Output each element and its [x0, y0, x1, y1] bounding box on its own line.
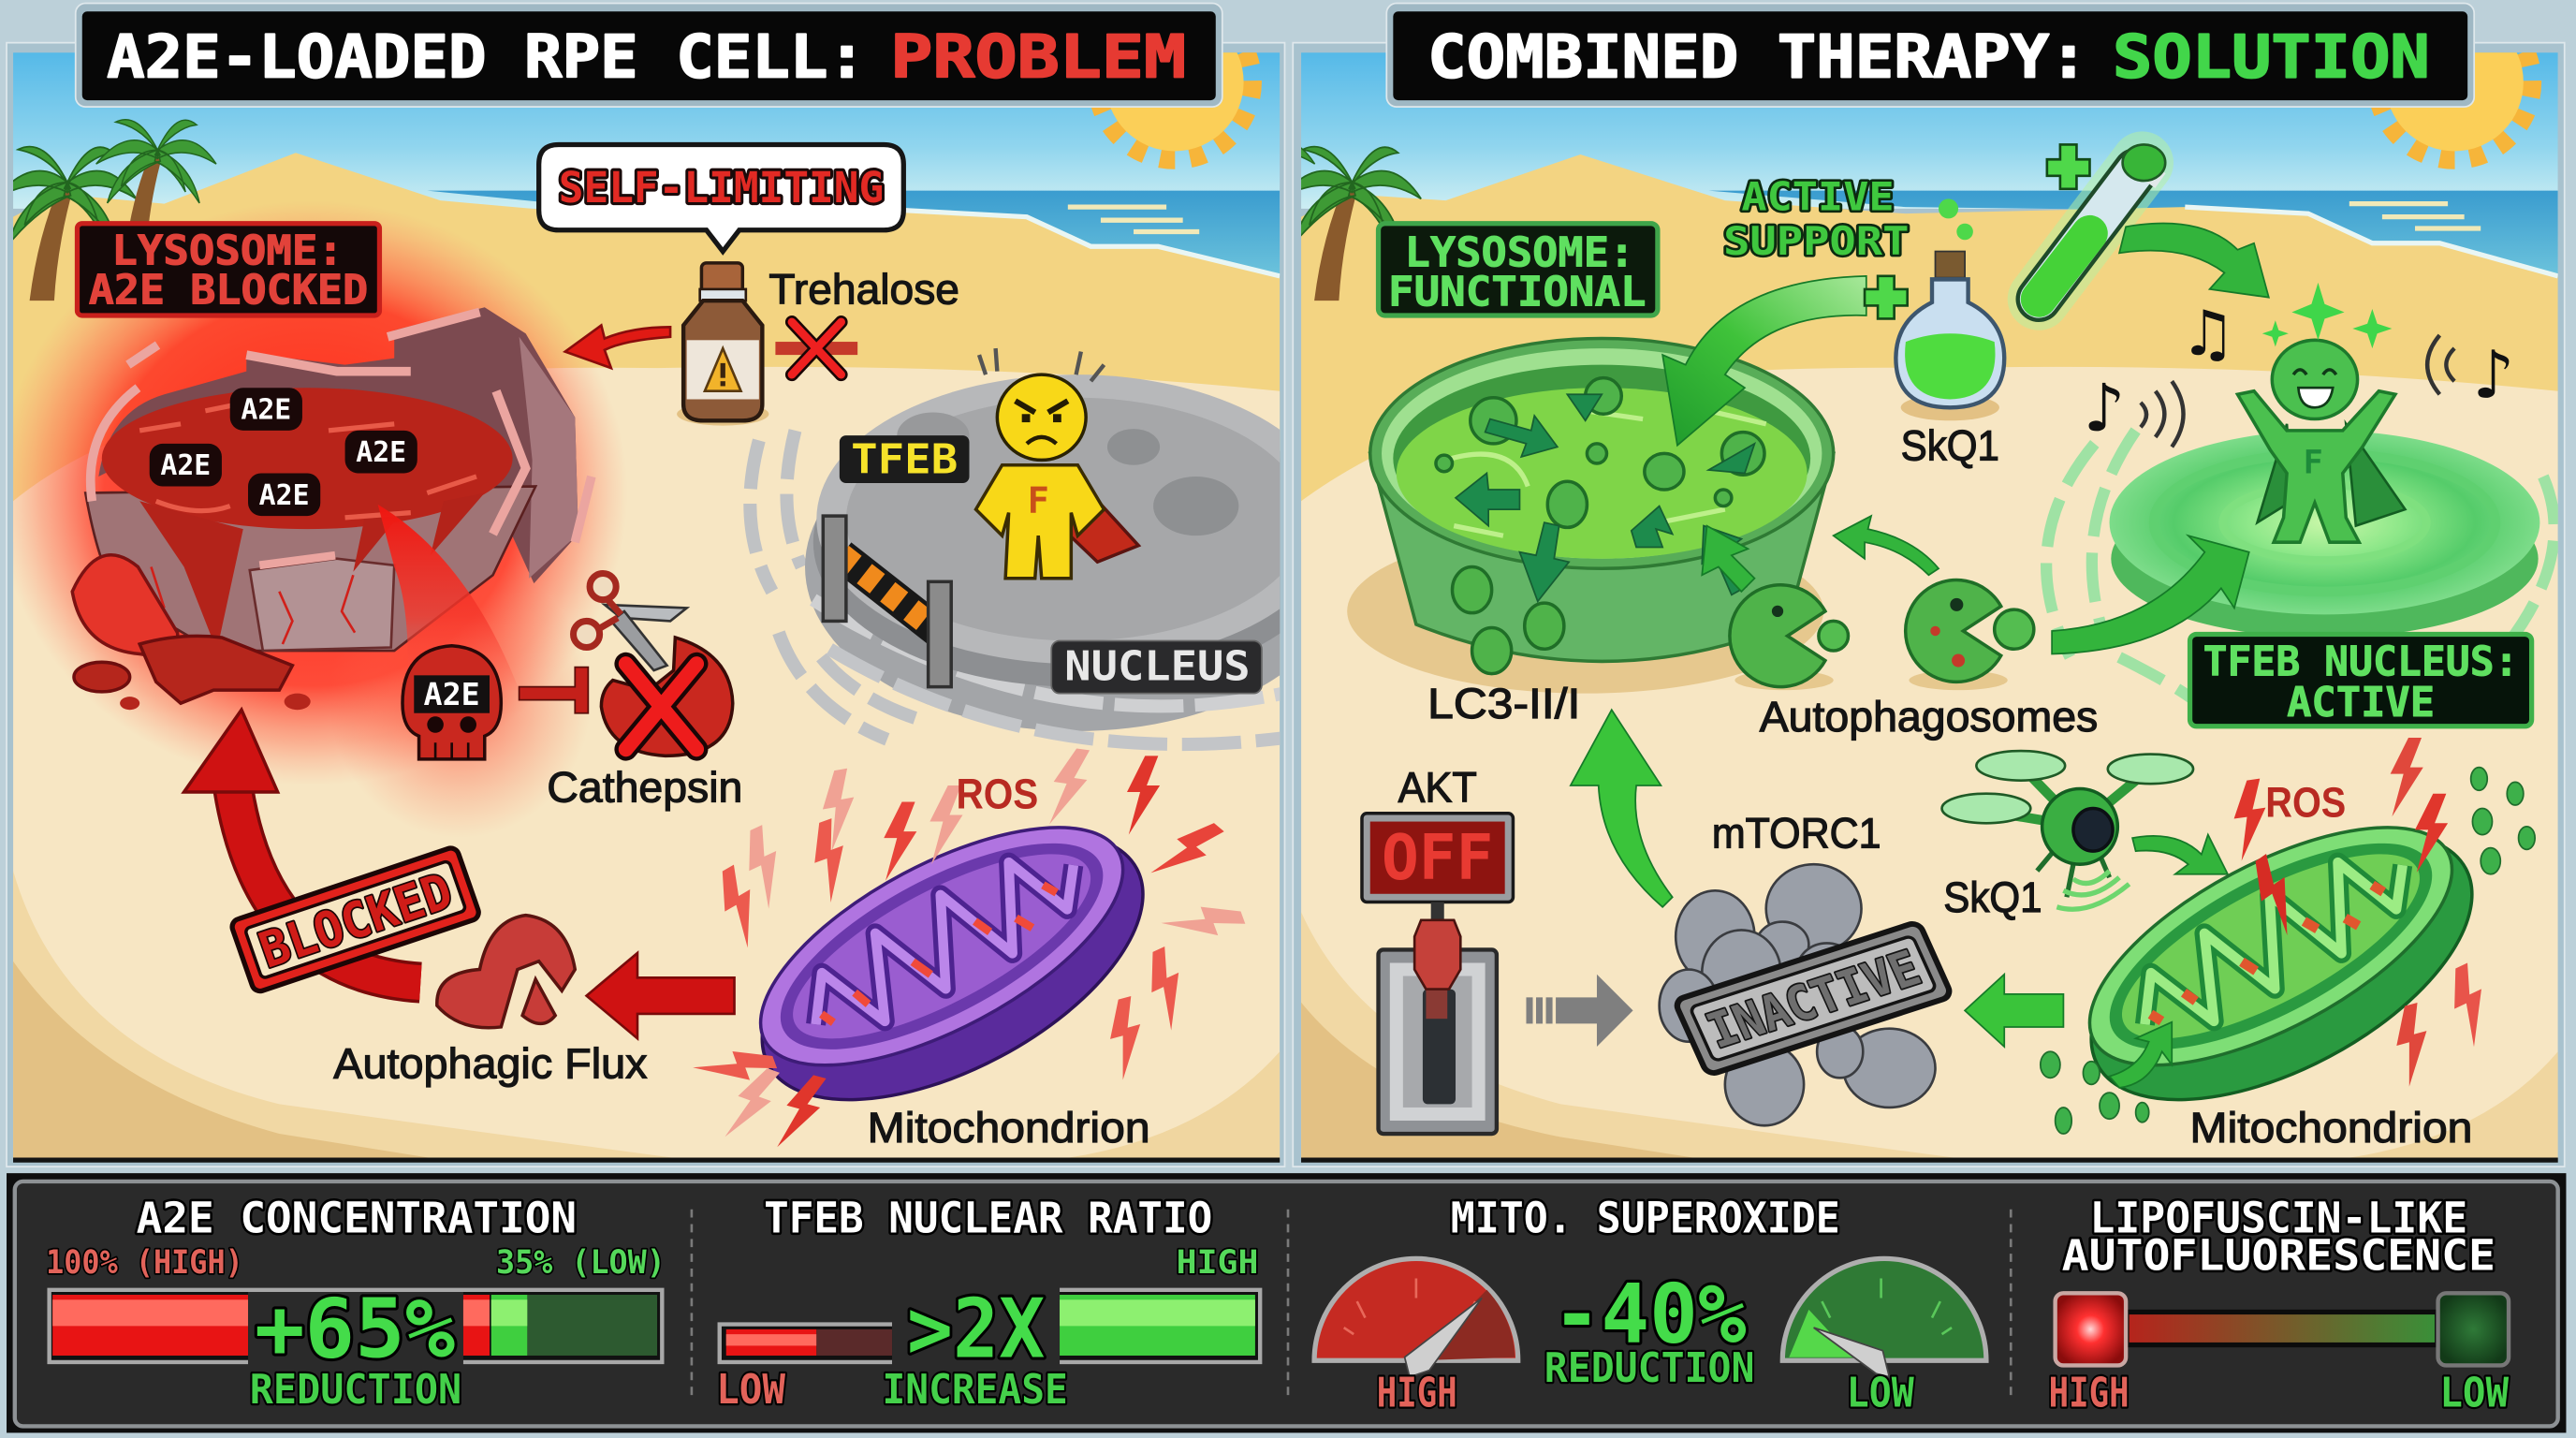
metric: a2e concentration: 100% (HIGH): [46, 1243, 243, 1282]
lysosome rear shell: [98, 307, 578, 583]
goo highlights: [139, 404, 476, 518]
broken lysosome: [72, 307, 592, 710]
icon: inhibition bar: [520, 668, 588, 713]
arrow: drone to mitochondrion: [2132, 835, 2228, 874]
title: problem: A2E-LOADED RPE CELL:: [107, 22, 866, 91]
icon: healthy mitochondrion: [2048, 776, 2513, 1154]
sand dunes: [13, 153, 1280, 542]
callout: self-limiting: SELF-LIMITING: [559, 163, 884, 213]
label: active support: ACTIVE: [1741, 174, 1895, 220]
lysosome flow arrows: [1456, 394, 1754, 601]
label: autophagosomes: Autophagosomes: [1760, 693, 2098, 741]
arrow: particles into mitochondrion: [2110, 1022, 2172, 1088]
label: cathepsin: Cathepsin: [547, 763, 742, 811]
icon: plus: [2047, 144, 2089, 189]
label: skq1: SkQ1: [1901, 421, 1999, 469]
panel edges: [13, 1159, 2558, 1162]
gauge: low: [1782, 1258, 1986, 1377]
panel: metrics: [7, 1173, 2566, 1432]
metric: lipofuscin autofluorescence: AUTOFLUORESCENCE: [2062, 1231, 2496, 1281]
icon: angry tfeb hero: [976, 348, 1138, 579]
label: mitochondrion: Mitochondrion: [2190, 1104, 2472, 1152]
icon: autophagosomes: [1730, 580, 2034, 690]
icons: antioxidant particles: [2041, 768, 2535, 1134]
icon: a2e skull: [402, 646, 501, 759]
label: lysosome blocked: [77, 224, 379, 315]
metric: tfeb nuclear ratio: HIGH: [1177, 1243, 1258, 1282]
label: skq1 drone: SkQ1: [1943, 873, 2042, 921]
goo: [102, 388, 513, 529]
icon: sparkles: [2262, 283, 2392, 348]
icon: happy tfeb hero: [2237, 340, 2405, 542]
arrow: skq1 to lysosome: [1662, 276, 1866, 446]
title: problem: [76, 4, 1222, 107]
metric: lipofuscin autofluorescence: LIPOFUSCIN-LIKE: [2089, 1193, 2467, 1242]
metric: a2e concentration: +65%: [255, 1282, 455, 1377]
title: solution: [1386, 4, 2474, 107]
icon: mtorc1 cluster: [1660, 864, 1936, 1125]
gauge: high: [1314, 1258, 1518, 1377]
bar: a2e: [50, 1290, 662, 1362]
metric: a2e concentration: A2E CONCENTRATION: [137, 1193, 577, 1242]
icon: blocked cross: [775, 322, 857, 374]
label: tfeb nucleus active: TFEB NUCLEUS:: [2203, 638, 2519, 685]
bar: tfeb low: [720, 1325, 892, 1362]
icon: a2e skull: A2E: [424, 676, 480, 712]
arrow: mtorc1 to lc3: [1571, 710, 1673, 907]
a2e badges: A2E: [259, 479, 310, 512]
metric: tfeb nuclear ratio: >2X: [907, 1282, 1045, 1377]
icon: cathepsin blocked: [601, 638, 733, 756]
metric: tfeb nuclear ratio: TFEB NUCLEAR RATIO: [764, 1193, 1212, 1242]
a2e badges: A2E: [356, 436, 406, 469]
arrow: akt to mtorc1: [1526, 975, 1633, 1047]
nucleus: [750, 374, 1347, 744]
metric: mito superoxide: -40%: [1553, 1267, 1747, 1362]
icon: healthy lysosome: [1347, 339, 1834, 694]
lower sand shading: [13, 871, 690, 1160]
cream ground: [1301, 367, 2558, 1160]
metric: a2e concentration: [46, 1193, 666, 1414]
rim: [91, 312, 592, 542]
metric: lipofuscin autofluorescence: LOW: [2439, 1369, 2510, 1416]
icons: neutralised ros bolts: [2229, 738, 2502, 1087]
label: tfeb: TFEB: [851, 435, 958, 483]
label: lysosome blocked: LYSOSOME:: [111, 227, 344, 275]
label: active support: [1723, 174, 1909, 264]
slider: fluorescence: [2056, 1293, 2509, 1365]
front wall: [85, 487, 535, 651]
label: tfeb nucleus active: ACTIVE: [2287, 679, 2435, 726]
arrow: blocked flux loop: [184, 710, 420, 983]
label: mitochondrion: Mitochondrion: [868, 1104, 1150, 1152]
label: lysosome functional: LYSOSOME:: [1405, 228, 1634, 276]
icons: music notes and sound waves: [2083, 297, 2514, 447]
a2e badges: A2E: [160, 449, 211, 482]
metric: a2e concentration: 35% (LOW): [496, 1243, 666, 1282]
label: lysosome functional: FUNCTIONAL: [1388, 268, 1647, 315]
label: autophagic flux: Autophagic Flux: [333, 1039, 648, 1087]
icon: autophagic fragments: [437, 916, 575, 1028]
icon: palm trees: [0, 120, 216, 301]
label: ros: ROS: [956, 770, 1038, 818]
icons: music notes and sound waves: ♪: [2472, 337, 2514, 414]
lysosome glow: [0, 200, 627, 785]
panel: problem scene: [0, 7, 1347, 1167]
arrow: autophagosome to nucleus: [2052, 536, 2249, 654]
metric: mito superoxide: MITO. SUPEROXIDE: [1451, 1193, 1840, 1242]
icon: test tube: [2039, 144, 2165, 299]
icon: palm trees: [1301, 146, 1422, 301]
title: problem: PROBLEM: [890, 22, 1186, 91]
label: lysosome blocked: A2E BLOCKED: [89, 267, 368, 315]
icon: trehalose bottle: [677, 263, 768, 426]
a2e badges: [150, 388, 417, 516]
metric: mito superoxide: LOW: [1847, 1369, 1914, 1416]
label: nucleus: NUCLEUS: [1064, 643, 1251, 691]
label: trehalose: Trehalose: [768, 266, 959, 314]
label: mtorc1: mTORC1: [1712, 810, 1881, 858]
title: solution: COMBINED THERAPY:: [1427, 22, 2088, 91]
sun: [1091, 52, 1262, 169]
label: active support: SUPPORT: [1723, 218, 1909, 264]
arrow: trehalose to lysosome: [565, 326, 670, 368]
icon: plus: [1865, 276, 1908, 318]
icons: ros bolts: [693, 746, 1246, 1155]
sky: [13, 52, 1280, 209]
metric: tfeb nuclear ratio: [716, 1193, 1260, 1414]
stamp: blocked: BLOCKED: [253, 862, 460, 980]
callout: self-limiting: [539, 144, 903, 252]
metric: lipofuscin autofluorescence: HIGH: [2049, 1369, 2130, 1416]
arrow: into lysosome: [378, 505, 520, 690]
label: ros: ROS: [2265, 778, 2346, 826]
stamp: inactive: INACTIVE: [1699, 941, 1929, 1060]
arrow: mitochondrion to flux: [587, 953, 735, 1038]
sky: [1301, 52, 2558, 209]
sun: [2371, 52, 2542, 169]
arrow: mitochondrion to mtorc1: [1965, 975, 2063, 1047]
label: lc3: LC3-II/I: [1427, 680, 1580, 727]
icon: damaged mitochondrion: [719, 776, 1185, 1154]
drips: [72, 555, 311, 710]
metric: mito superoxide: REDUCTION: [1544, 1344, 1754, 1392]
panel: solution scene: [1194, 7, 2565, 1167]
lysosome vesicles: [1436, 378, 1764, 674]
arrow: autophagosome to lysosome: [1702, 516, 1939, 592]
metric: tfeb nuclear ratio: INCREASE: [882, 1366, 1068, 1414]
label: tfeb nucleus active: [2190, 634, 2532, 726]
icon: happy tfeb hero: F: [2304, 443, 2323, 481]
bar: tfeb high: [1060, 1290, 1260, 1362]
cream ground: [13, 367, 1280, 1160]
sea: [1708, 191, 2558, 276]
cracks: [151, 567, 355, 644]
arrow: tube to tfeb: [2119, 223, 2269, 298]
icon: skq1 drone: [1942, 751, 2193, 909]
metric: lipofuscin autofluorescence: [2049, 1193, 2510, 1416]
icons: music notes and sound waves: ♪: [2083, 370, 2125, 447]
icon: off switch: OFF: [1382, 821, 1493, 894]
title: solution: SOLUTION: [2113, 22, 2430, 91]
icons: music notes and sound waves: ♫: [2180, 297, 2236, 370]
metric: tfeb nuclear ratio: LOW: [716, 1366, 785, 1414]
lower sand shading: [1301, 912, 1971, 1160]
sea: [427, 191, 1280, 276]
label: akt: AKT: [1398, 763, 1477, 811]
a2e badges: A2E: [241, 394, 291, 427]
metric: a2e concentration: REDUCTION: [250, 1366, 461, 1414]
label: lysosome functional: [1379, 224, 1658, 315]
icon: scissors: [574, 574, 687, 670]
icon: off switch: [1362, 814, 1513, 1134]
metric: mito superoxide: [1314, 1193, 1986, 1416]
icon: skq1 flask: [1895, 198, 2004, 420]
sand dunes: [1301, 154, 2558, 542]
nucleus platform: [2046, 431, 2554, 707]
icon: barrier: [823, 516, 951, 687]
icon: angry tfeb hero: F: [1028, 480, 1049, 522]
metric: mito superoxide: HIGH: [1377, 1369, 1457, 1416]
